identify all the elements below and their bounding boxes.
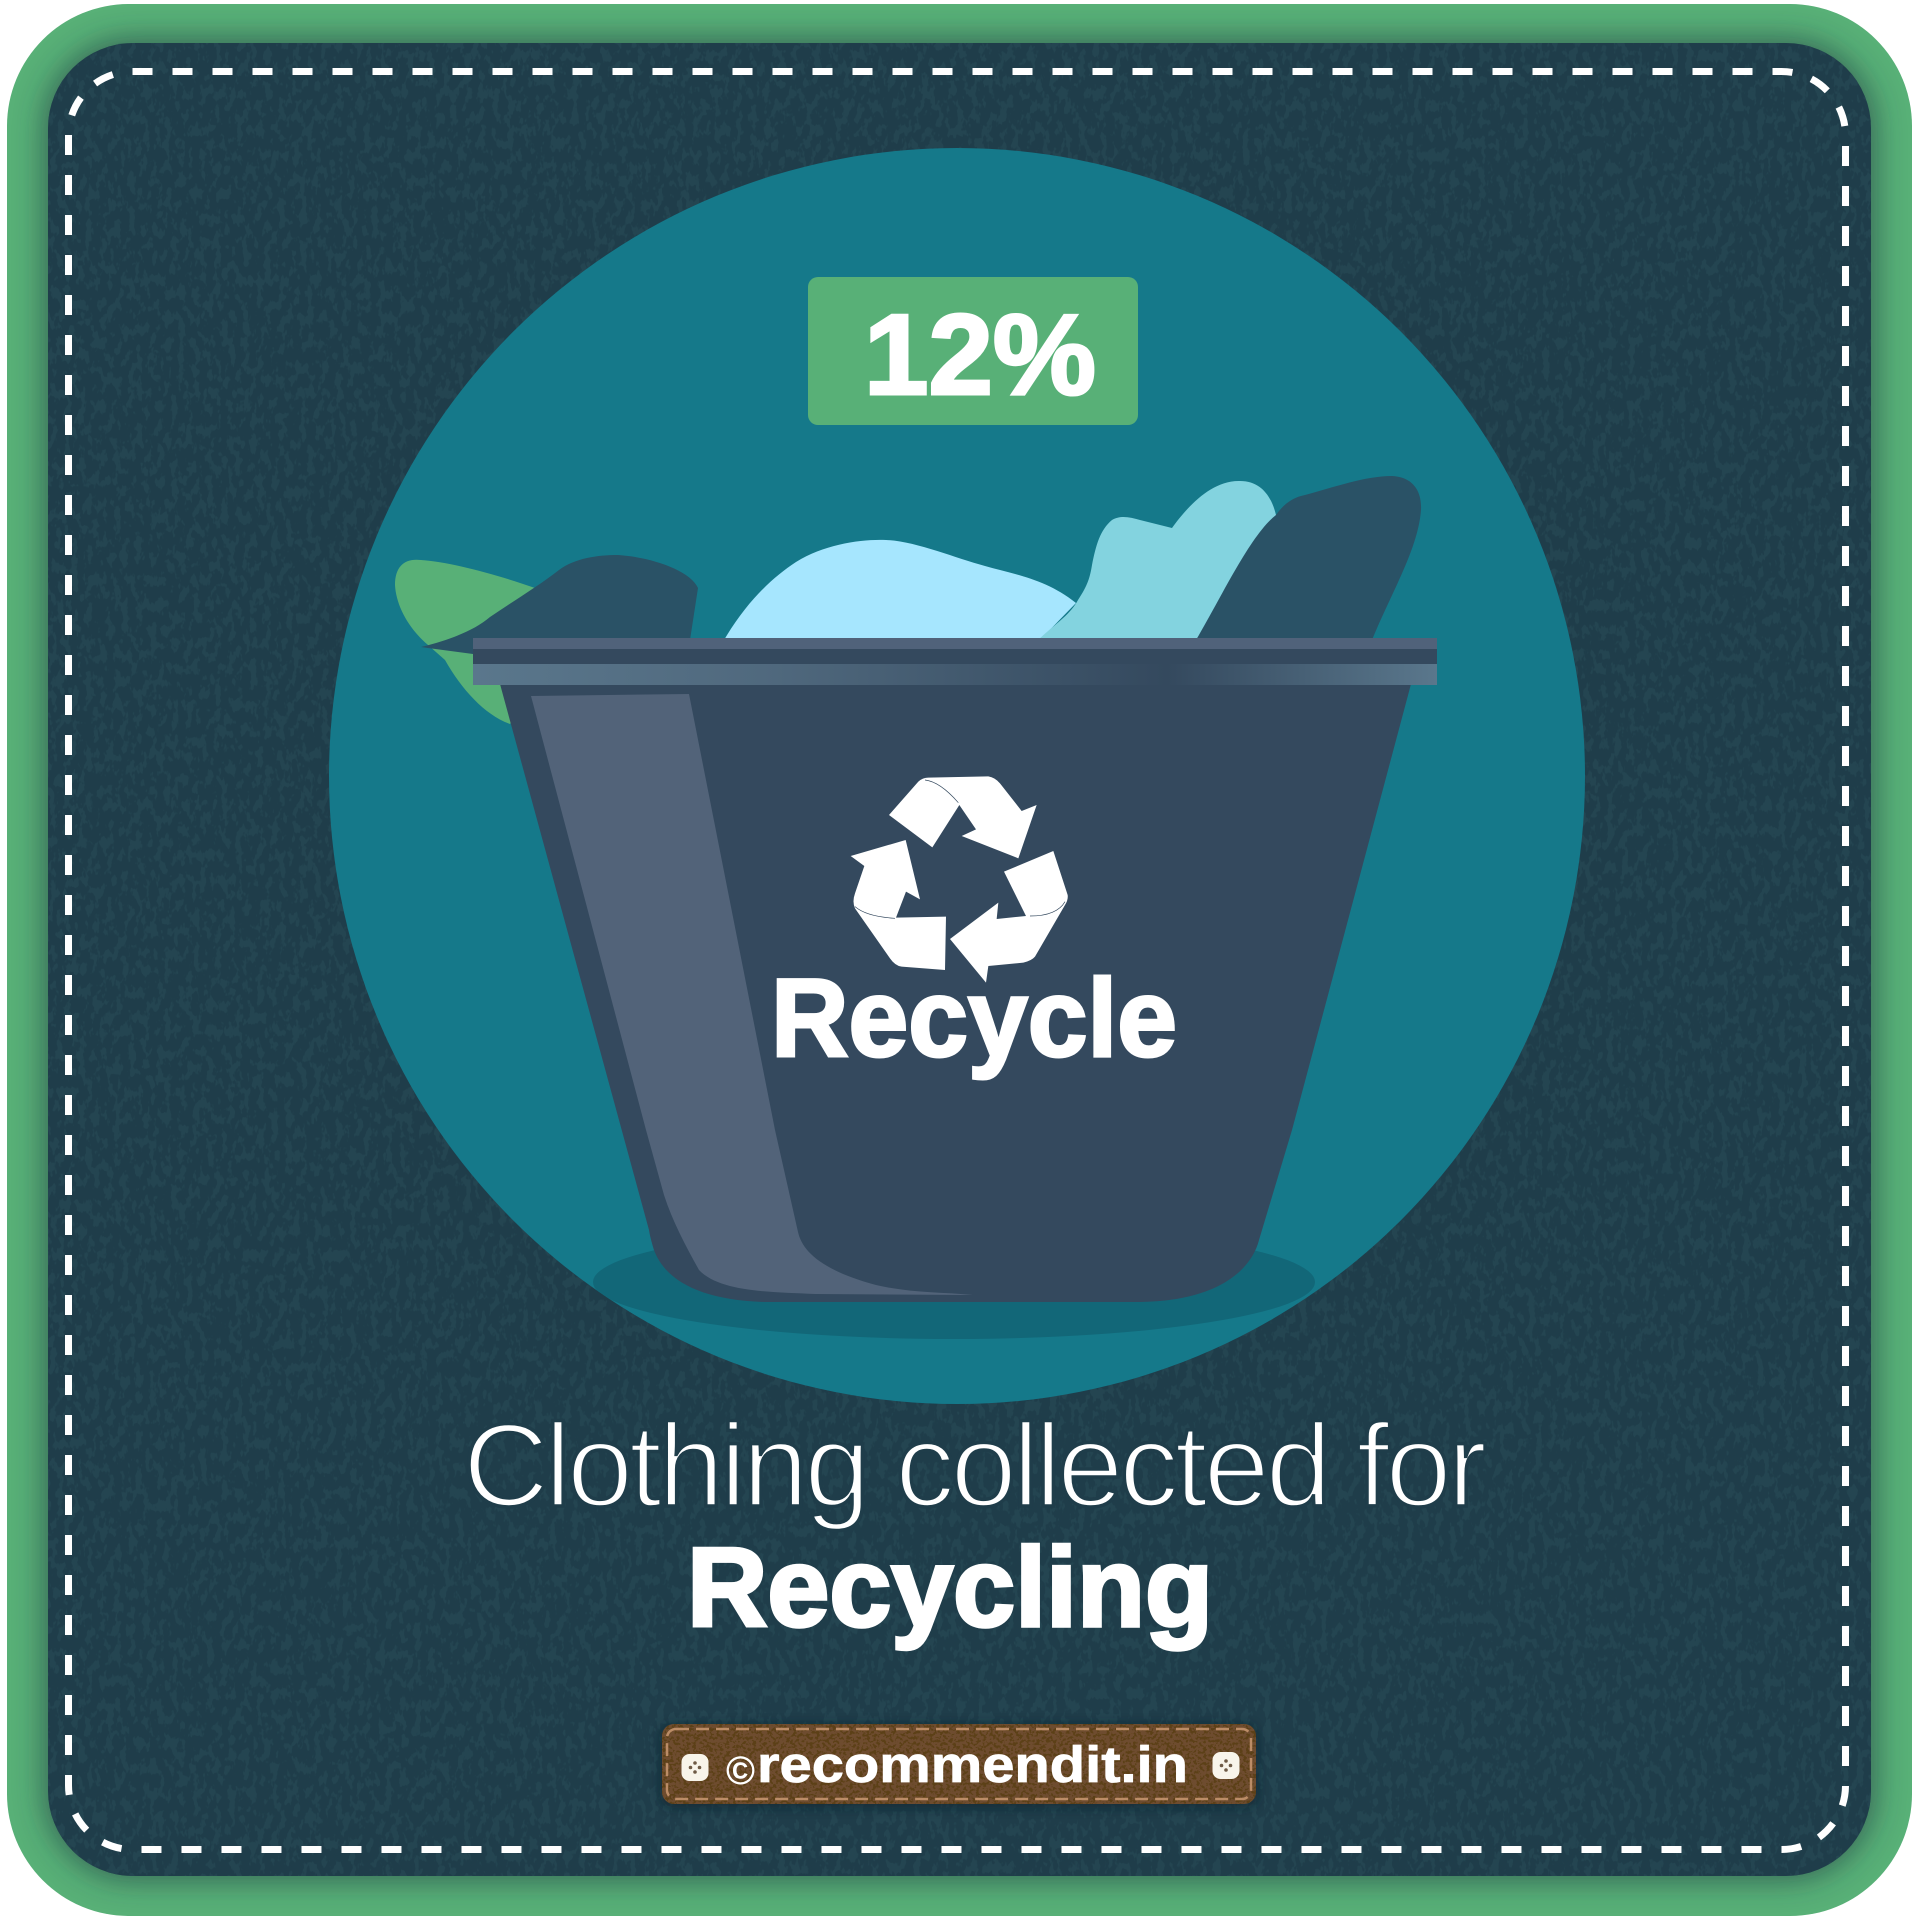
recycling bin (473, 638, 1437, 1302)
icon: recycling arrows (851, 776, 1068, 983)
copyright mark: © (726, 1749, 755, 1793)
dark right garment (1196, 476, 1421, 640)
left button (682, 1754, 708, 1781)
title line 1: Clothing collected for (463, 1400, 1486, 1532)
percentage badge: 12% (864, 292, 1096, 419)
website text: recommendit.in (757, 1736, 1188, 1793)
bin highlight (531, 694, 973, 1295)
rim lower band (473, 664, 1437, 685)
rim middle band (473, 649, 1437, 664)
leather label shadow (660, 1724, 1258, 1808)
bin body (500, 684, 1411, 1302)
dark left garment (421, 555, 698, 654)
percentage badge (808, 277, 1138, 425)
bin floor shadow (593, 1250, 1315, 1339)
right button (1212, 1752, 1240, 1779)
bin label: Recycle: Recycle (771, 957, 1177, 1080)
clothes in the bin (395, 476, 1421, 724)
teal circle (329, 148, 1585, 1404)
title line 2: Recycling (687, 1525, 1213, 1650)
aqua garment (1038, 481, 1280, 640)
pale blue garment (724, 540, 1076, 640)
leather label (662, 1724, 1256, 1804)
green garment (395, 560, 560, 724)
rim top band (473, 638, 1437, 649)
